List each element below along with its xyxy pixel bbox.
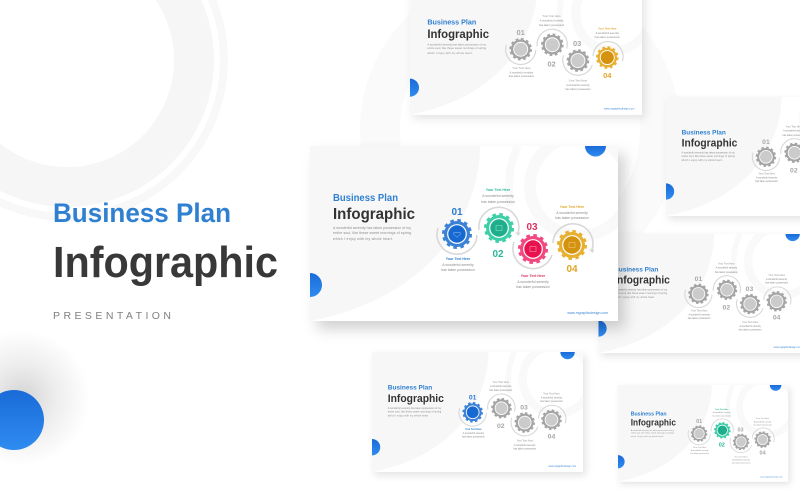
slide: top, step 04 highlighted: 01 (517, 28, 525, 37)
slide: top, step 04 highlighted: Business Plan (427, 17, 477, 26)
footer url: www.mgraphicdesign.com (567, 311, 608, 315)
text block 03 (516, 274, 550, 289)
text block 01: Your Text Here (446, 257, 470, 261)
slide: top, step 04 highlighted: Your Text Here (598, 27, 617, 31)
slide: bottom right, step 02 highlighted: Your Text Here (734, 455, 748, 458)
slide: top, step 04 highlighted: www.mgraphicdesign.com (604, 107, 635, 111)
slide: right middle, all grey: Business Plan (614, 266, 658, 273)
text block 01: A wonderful serenity (442, 263, 474, 267)
slide: bottom left, step 01 highlighted: A wonderful serenity (490, 385, 512, 388)
slide: right middle, all grey: A wonderful serenity (766, 278, 788, 281)
slide: top, step 04 highlighted: A wonderful serenity (510, 70, 534, 74)
slide: top, step 04 highlighted: has taken possession (509, 74, 535, 78)
slide: bottom left, step 01 highlighted: Your Text Here (516, 440, 534, 443)
slide: right top, all grey: has taken possession (755, 180, 779, 183)
decorative ring top left (0, 0, 224, 217)
slide: top, step 04 highlighted: A wonderful serenity (540, 18, 564, 22)
slide: top, step 04 highlighted: 04 (603, 71, 612, 80)
text block 02: A wonderful serenity (482, 194, 514, 198)
slide: right top, all grey: 02 (790, 167, 798, 174)
slide: right middle, all grey: Your Text Here (691, 310, 708, 313)
slide: top, step 04 highlighted: 03 (573, 39, 581, 48)
text block 01: has taken possession (441, 268, 475, 272)
slide: bottom left, step 01 highlighted: which I enjoy with my whole heart. (388, 414, 429, 417)
main slide heading: Business Plan (333, 193, 398, 204)
slide: bottom right, step 02 highlighted: Your Text Here (693, 446, 706, 449)
slide: right middle, all grey: 04 (773, 315, 781, 322)
slide: right middle, all grey: has taken possession (765, 282, 789, 285)
subtitle: Presentation: PRESENTATION (53, 310, 171, 322)
slide: right middle, all grey: A wonderful serenity has taken possession of my (614, 288, 668, 291)
panel: main slide (310, 136, 630, 321)
slide: right middle, all grey: has taken possession (715, 271, 738, 274)
slide: bottom right, step 02 highlighted: A wonderful serenity (713, 411, 730, 414)
main slide description: which I enjoy with my whole heart. (333, 237, 393, 241)
slide: bottom left, step 01 highlighted: Your Text Here (465, 428, 482, 431)
number 03: 03 (526, 222, 538, 233)
slide: bottom left, step 01 highlighted: Your Text Here (543, 392, 560, 395)
text block 03: has taken possession (516, 285, 550, 289)
slide: bottom right, step 02 highlighted: A wonderful serenity (754, 421, 771, 424)
slide: bottom right, step 02 highlighted: 03 (737, 427, 744, 433)
slide: bottom left, step 01 highlighted: 02 (497, 423, 505, 430)
slide: right middle, all grey (598, 227, 800, 353)
slide: bottom right, step 02 highlighted (618, 379, 795, 482)
slide: bottom left, step 01 highlighted: 03 (520, 405, 528, 412)
slide: bottom right, step 02 highlighted: which I enjoy with my whole heart. (631, 435, 664, 438)
heading: Infographic: Infographic (53, 238, 278, 287)
slide: right top, all grey: A wonderful serenity (756, 177, 778, 180)
slide: bottom left, step 01 highlighted (372, 345, 591, 472)
slide: top, step 04 highlighted: has taken possession (539, 23, 565, 27)
slide: bottom right, step 02 highlighted: Your Text Here (756, 417, 769, 420)
slide: top, step 04 highlighted: has taken possession (595, 35, 620, 39)
slide: right top, all grey: Infographic (682, 138, 737, 150)
slide: bottom right, step 02 highlighted: entire soul, like these sweet mornings of spring (631, 432, 674, 435)
slide: right top, all grey: A wonderful serenity has taken possession of my (682, 151, 735, 154)
slide: top, step 04 highlighted: entire soul, like these sweet mornings of spring (427, 46, 487, 50)
slide: right middle, all grey: which I enjoy with my whole heart. (614, 296, 655, 299)
blue circle with glow (0, 330, 90, 466)
slide: right middle, all grey: Your Text Here (768, 274, 786, 277)
slide: bottom right, step 02 highlighted: Infographic (631, 417, 676, 427)
slide: bottom left, step 01 highlighted: has taken possession (489, 389, 513, 392)
text block 03: Your Text Here (521, 274, 545, 278)
gear 04 yellow (559, 232, 585, 258)
slide: bottom left, step 01 highlighted: A wonderful serenity has taken possession of my (388, 407, 442, 410)
slide: bottom left, step 01 highlighted: A wonderful serenity (541, 397, 563, 400)
text block 04: Your Text Here (560, 205, 584, 209)
arcs around gears (437, 207, 594, 269)
slide: bottom right, step 02 highlighted: has taken possession (732, 461, 750, 464)
slide: top, step 04 highlighted: A wonderful serenity has taken possession of my (427, 42, 487, 46)
slide: bottom right, step 02 highlighted: 04 (760, 451, 767, 457)
slide: top, step 04 highlighted: A wonderful serenity (595, 31, 620, 35)
slide: right middle, all grey: A wonderful serenity (716, 267, 738, 270)
text block 04: A wonderful serenity (556, 211, 588, 215)
slide: right middle, all grey: Infographic (614, 275, 670, 287)
slide: top, step 04 highlighted: Infographic (427, 27, 489, 41)
slide: top, step 04 highlighted (410, 0, 651, 115)
slide: right middle, all grey: 01 (695, 276, 702, 283)
number 04: 04 (566, 264, 578, 275)
slide: top, step 04 highlighted: has taken possession (565, 87, 591, 91)
slide: top, step 04 highlighted: Your Text Here (512, 66, 531, 70)
slide: bottom right, step 02 highlighted: has taken possession (690, 452, 709, 455)
slide: right middle, all grey: has taken possession (688, 317, 711, 320)
slide: bottom right, step 02 highlighted: has taken possession (713, 414, 731, 417)
slide: bottom right, step 02 highlighted: A wonderful serenity has taken possession of my (631, 429, 674, 432)
slide: right middle, all grey: A wonderful serenity (739, 325, 762, 328)
slide: right middle, all grey: 02 (723, 304, 730, 311)
slide: bottom left, step 01 highlighted: Business Plan (388, 385, 432, 392)
slide: bottom left, step 01 highlighted: entire soul, like these sweet mornings of spring (388, 410, 442, 413)
slide: bottom right, step 02 highlighted: 01 (696, 419, 702, 425)
slide: bottom left, step 01 highlighted: has taken possession (462, 436, 485, 439)
slide: right middle, all grey: 03 (746, 286, 753, 293)
slide: top, step 04 highlighted: Your Text Here (569, 79, 588, 83)
slide: right top, all grey: Business Plan (682, 129, 726, 136)
slide: bottom left, step 01 highlighted: has taken possession (513, 447, 537, 450)
slide: bottom right, step 02 highlighted: has taken possession (753, 423, 772, 426)
text block 02: Your Text Here (486, 188, 510, 192)
slide: right middle, all grey: Your Text Here (742, 321, 759, 324)
slide: right top, all grey: entire soul, like these sweet mornings of spring (682, 155, 735, 158)
main slide description: A wonderful serenity has taken possession of my (333, 226, 411, 230)
slide: bottom right, step 02 highlighted: www.mgraphicdesign.com (760, 476, 783, 479)
text block 02 (481, 188, 515, 204)
slide: bottom right, step 02 highlighted: A wonderful serenity (691, 449, 708, 452)
text block 03: A wonderful serenity (517, 280, 549, 284)
slide: right middle, all grey: A wonderful serenity (688, 314, 711, 317)
slide: top, step 04 highlighted: which I enjoy with my whole heart. (427, 51, 473, 55)
slide: bottom right, step 02 highlighted: A wonderful serenity (732, 459, 750, 462)
slide: bottom left, step 01 highlighted: www.mgraphicdesign.com (549, 465, 576, 468)
gear 02 green (486, 215, 512, 241)
slide: bottom left, step 01 highlighted: Your Text Here (493, 381, 510, 384)
slide: right top, all grey: Your Text Here (758, 173, 776, 176)
main slide description (333, 226, 411, 241)
slide: bottom left, step 01 highlighted: Infographic (388, 393, 444, 405)
text block 02: has taken possession (481, 200, 515, 204)
number 02: 02 (492, 249, 504, 260)
heading: Business Plan: Business Plan (53, 198, 231, 228)
slide: right middle, all grey: has taken possession (739, 329, 762, 332)
main slide description: entire soul, like these sweet mornings of spring (333, 231, 411, 235)
number 01: 01 (451, 207, 463, 218)
slide: top, step 04 highlighted: 02 (547, 60, 556, 69)
main slide title: Infographic (333, 206, 415, 223)
slide: bottom right, step 02 highlighted: Business Plan (631, 411, 667, 417)
slide: bottom left, step 01 highlighted: A wonderful serenity (514, 444, 536, 447)
slide: top, step 04 highlighted: A wonderful serenity (566, 83, 590, 87)
text block 01 (441, 257, 475, 272)
slide: bottom left, step 01 highlighted: has taken possession (540, 400, 564, 403)
slide: right middle, all grey: entire soul, like these sweet mornings of spring (614, 292, 668, 295)
slide: bottom left, step 01 highlighted: A wonderful serenity (463, 432, 485, 435)
text block 04 (555, 205, 589, 220)
slide: right top, all grey (666, 126, 800, 222)
slide: bottom right, step 02 highlighted: 02 (719, 442, 725, 448)
gear 03 red (520, 236, 546, 262)
text block 04: has taken possession (555, 216, 589, 220)
faint background swirl (380, 0, 660, 270)
slide: right middle, all grey: Your Text Here (718, 263, 735, 266)
slide: bottom left, step 01 highlighted: 04 (548, 433, 555, 440)
slide: bottom left, step 01 highlighted: 01 (469, 394, 477, 401)
slide: right top, all grey: 01 (762, 139, 770, 146)
gear 01 blue (444, 221, 470, 247)
slide: bottom right, step 02 highlighted: Your Text Here (715, 408, 728, 411)
slide: top, step 04 highlighted: Your Text Here (542, 14, 561, 18)
slide: right top, all grey: which I enjoy with my whole heart. (682, 159, 723, 162)
